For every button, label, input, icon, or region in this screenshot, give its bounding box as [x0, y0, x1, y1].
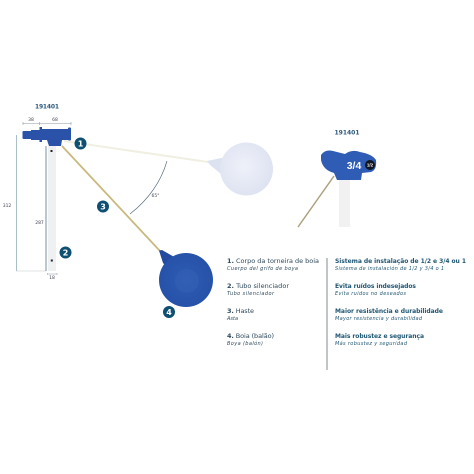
parts list: Tubo silenciador: [227, 291, 275, 297]
divider: [326, 258, 328, 370]
dimension lines: [3, 117, 71, 281]
parts list: [226, 257, 319, 347]
features list: Maior resistência e durabilidade: [335, 308, 443, 315]
features list: Sistema de instalación de 1/2 y 3/4 o 1: [335, 265, 444, 272]
badge 4: [163, 306, 175, 318]
badge 4: 4: [166, 308, 172, 317]
parts list: Asta: [226, 316, 238, 322]
badge 2: [60, 246, 72, 258]
right product photo: [298, 150, 376, 227]
dimension lines: 18: [49, 275, 55, 281]
parts list: 2. Tubo silenciador: [227, 282, 289, 290]
left drawing code: 191401: [35, 104, 59, 110]
parts list: Boya (balón): [227, 340, 263, 347]
dimension lines: 68: [52, 117, 58, 123]
white rod: [64, 141, 208, 162]
brass rod: [62, 146, 160, 251]
parts list: Cuerpo del grifo de boya: [227, 266, 298, 272]
features list: Evita ruídos indesejados: [335, 283, 416, 290]
features list: Sistema de instalação de 1/2 e 3/4 ou 1: [335, 258, 466, 265]
angle arc: 65°: [152, 193, 159, 199]
valve body: [22, 127, 71, 146]
badge 3: 3: [100, 202, 106, 212]
right drawing code: 191401: [334, 130, 360, 136]
badge 3: [97, 200, 109, 212]
features list: Más robustez y seguridad: [335, 340, 408, 347]
parts list: 4. Boia (balão): [227, 332, 274, 340]
features list: Evita ruidos no deseados: [335, 291, 406, 297]
right product photo: 1/2: [367, 163, 374, 168]
white ball float: [207, 142, 273, 196]
features list: Mayor resistencia y durabilidad: [335, 316, 423, 322]
right product photo: 3/4: [347, 160, 361, 172]
features list: [335, 258, 466, 347]
badge 1: 1: [78, 140, 84, 148]
dimension lines: 38: [28, 117, 34, 123]
badge 1: [74, 138, 86, 150]
badge 2: 2: [63, 248, 68, 258]
features list: Mais robustez e segurança: [335, 333, 424, 340]
silencer tube: [48, 146, 56, 271]
dimension lines: 287: [35, 220, 44, 226]
parts list: 1. Corpo da torneira de boia: [227, 257, 319, 265]
angle arc: [130, 161, 167, 214]
dimension lines: 312: [3, 203, 11, 209]
blue ball float: [159, 250, 213, 307]
parts list: 3. Haste: [227, 307, 254, 315]
